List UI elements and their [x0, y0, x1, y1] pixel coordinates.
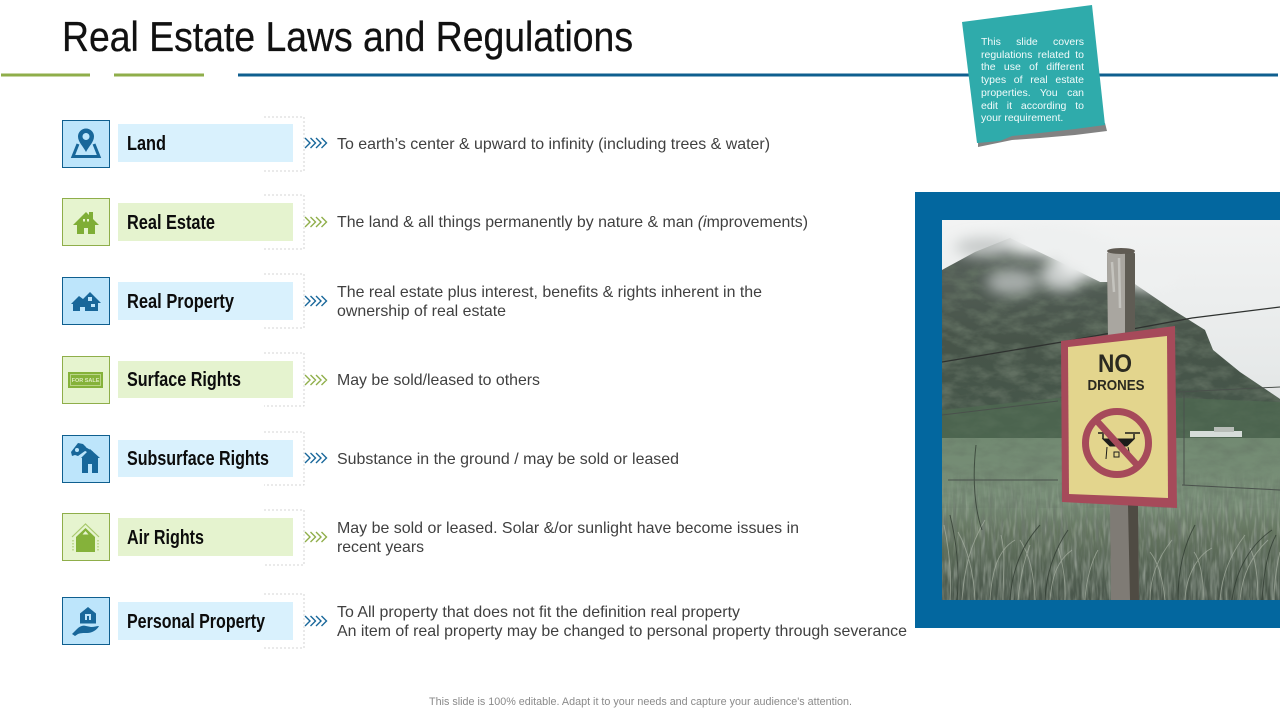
sticky note callout: types of real estate — [981, 74, 1084, 86]
label: Real Property — [118, 274, 304, 328]
label: Air Rights: Air Rights — [127, 527, 204, 549]
arrow — [305, 217, 326, 227]
label: Land — [118, 117, 304, 171]
icon: house — [62, 198, 110, 246]
farm buildings — [1190, 427, 1242, 437]
label: Subsurface Rights — [118, 432, 304, 485]
arrow — [305, 296, 326, 306]
sticky note callout — [962, 5, 1107, 147]
title: Real Estate Laws and Regulations — [62, 13, 633, 60]
sticky note callout: your requirement. — [981, 112, 1063, 124]
description: The land & all things permanently by nature & man (improvements) — [337, 214, 808, 231]
label: Surface Rights: Surface Rights — [127, 369, 241, 391]
clouds — [955, 224, 1180, 295]
description — [337, 284, 762, 320]
arrow — [305, 375, 326, 385]
header rule — [1, 74, 1278, 76]
field — [942, 438, 1280, 600]
icon: two houses — [62, 278, 110, 324]
description: To All property that does not fit the definition real property — [337, 604, 740, 621]
description: The real estate plus interest, benefits & rights inherent in the — [337, 284, 762, 301]
warning sign: NO — [1098, 350, 1132, 378]
icon: house with air lines — [62, 514, 110, 560]
row: Air Rights — [62, 510, 799, 565]
sticky note callout: regulations related to — [981, 49, 1084, 61]
label: Personal Property — [118, 594, 304, 648]
sticky note callout: This slide covers — [981, 36, 1084, 48]
row: Surface Rights — [62, 353, 540, 406]
label: Surface Rights — [118, 353, 304, 406]
drone — [1098, 433, 1140, 459]
description — [337, 520, 799, 556]
arrow — [305, 138, 326, 148]
arrow — [305, 616, 326, 626]
mountain — [942, 238, 1280, 444]
description — [337, 604, 907, 640]
grass blades — [944, 520, 1280, 600]
arrow — [305, 532, 326, 542]
warning sign: DRONES — [1088, 377, 1144, 394]
label: Real Estate — [118, 195, 304, 249]
sticky note callout: the use of different — [981, 61, 1084, 73]
row: Land — [62, 117, 770, 171]
row: Real Estate — [62, 195, 808, 249]
arrow — [305, 453, 326, 463]
icon: for sale sign — [62, 356, 110, 404]
description: Substance in the ground / may be sold or leased — [337, 451, 679, 468]
row: Subsurface Rights — [62, 432, 679, 485]
label: Land: Land — [127, 133, 166, 155]
icon: house in hand — [62, 598, 110, 644]
description: May be sold/leased to others — [337, 372, 540, 389]
photo panel: no drones sign — [915, 192, 1280, 628]
label: Real Estate: Real Estate — [127, 212, 215, 234]
icon: key and house — [62, 436, 110, 482]
footer note: This slide is 100% editable. Adapt it to your needs and capture your audience's attention. — [429, 696, 852, 708]
description: To earth’s center & upward to infinity (including trees & water) — [337, 136, 770, 153]
sticky note callout: properties. You can — [981, 87, 1084, 99]
description: May be sold or leased. Solar &/or sunlight have become issues in — [337, 520, 799, 537]
sticky note callout: edit it according to — [981, 100, 1084, 112]
label: Air Rights — [118, 510, 304, 565]
description: recent years — [337, 539, 424, 556]
description: An item of real property may be changed to personal property through severance — [337, 623, 907, 640]
icon: map pin — [62, 120, 110, 168]
row: Real Property — [62, 274, 762, 328]
warning sign — [1061, 326, 1177, 508]
label: Real Property: Real Property — [127, 291, 235, 313]
icon: for sale sign: FOR SALE — [72, 378, 100, 384]
label: Personal Property: Personal Property — [127, 611, 266, 633]
description: ownership of real estate — [337, 303, 506, 320]
wooden post — [1107, 248, 1139, 600]
label: Subsurface Rights: Subsurface Rights — [127, 448, 269, 470]
row: Personal Property — [62, 594, 907, 648]
barbed wires — [942, 307, 1280, 490]
